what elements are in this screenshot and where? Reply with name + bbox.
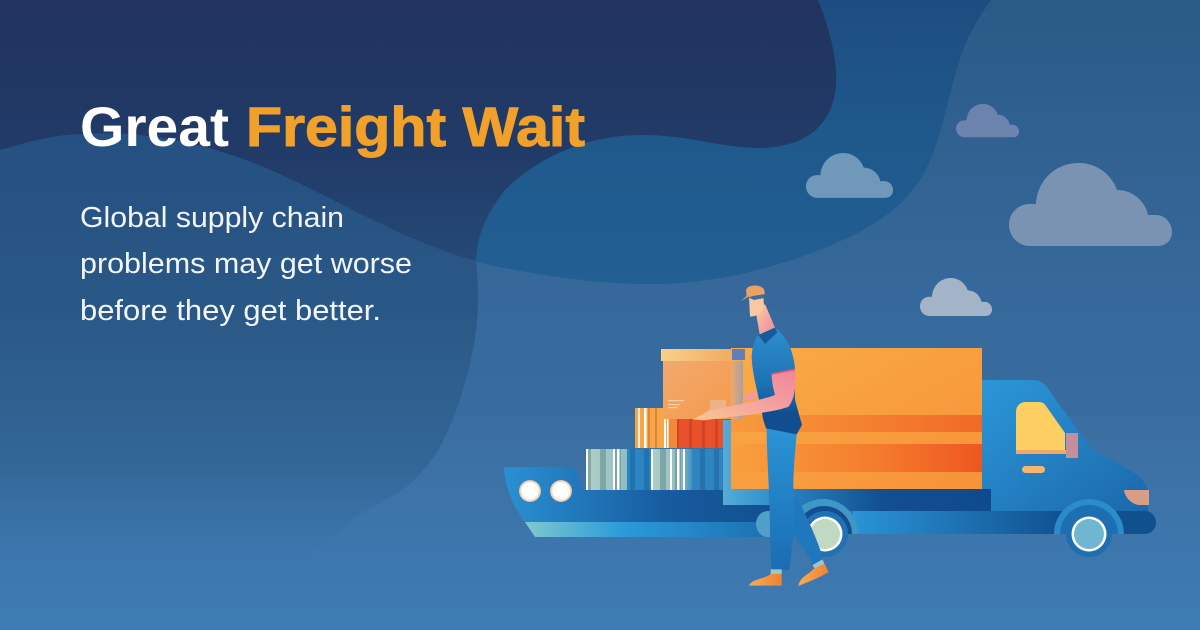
box tape xyxy=(732,349,745,360)
under-cargo strip xyxy=(775,489,991,511)
porthole left xyxy=(519,480,541,502)
shirt xyxy=(752,328,802,434)
title words: Freight Wait: Freight Wait xyxy=(246,95,585,158)
near arm and hand xyxy=(693,369,795,420)
container: top orange xyxy=(635,408,677,448)
hull xyxy=(504,467,780,522)
truck frame xyxy=(723,420,790,505)
subtitle: problems may get worse xyxy=(80,248,412,280)
mirror xyxy=(1066,433,1078,458)
rear wheel xyxy=(788,499,858,557)
cloud: lower xyxy=(920,278,992,316)
front shoe xyxy=(749,574,782,586)
door handle xyxy=(1022,466,1045,473)
porthole right xyxy=(550,480,572,502)
lighter left blob xyxy=(0,133,478,590)
subtitle: Global supply chain xyxy=(80,202,344,234)
cloud: top small xyxy=(956,104,1019,137)
sleeve edge xyxy=(772,369,795,375)
cloud: middle xyxy=(806,153,893,198)
mid blue blob xyxy=(476,0,991,284)
cab xyxy=(982,380,1148,511)
rear leg xyxy=(793,497,824,566)
box side shade xyxy=(731,361,743,419)
container: bottom right xyxy=(651,449,723,490)
rear shoe xyxy=(798,564,829,586)
box lid xyxy=(661,349,745,361)
headlight xyxy=(1124,490,1149,505)
subtitle: before they get better. xyxy=(80,295,381,327)
keel stripe xyxy=(525,522,772,537)
container: top red xyxy=(677,408,723,448)
cargo ship xyxy=(504,408,780,537)
far arm xyxy=(744,391,758,401)
title xyxy=(80,95,585,158)
container: bottom left xyxy=(586,449,651,490)
cloud: large xyxy=(1009,163,1172,246)
cargo box xyxy=(731,348,982,489)
delivery man xyxy=(693,286,829,586)
box body xyxy=(663,361,732,419)
chassis xyxy=(853,511,1156,534)
title word: Great: Great xyxy=(80,95,229,158)
navy blob xyxy=(0,0,991,284)
truck xyxy=(723,348,1156,557)
window sill xyxy=(1016,450,1066,454)
window xyxy=(1016,402,1065,450)
cap xyxy=(741,286,765,301)
box label xyxy=(668,400,726,418)
front leg xyxy=(767,428,797,570)
collar xyxy=(758,328,777,344)
clouds xyxy=(806,104,1172,316)
face xyxy=(749,296,764,317)
subtitle xyxy=(80,202,412,327)
front cuff xyxy=(771,569,782,574)
rear cuff xyxy=(813,559,824,569)
front wheel xyxy=(1054,499,1124,557)
glasses xyxy=(748,294,764,300)
neck xyxy=(756,304,775,336)
horizon band xyxy=(0,416,1200,630)
parcel box xyxy=(661,349,745,419)
fender bump xyxy=(756,511,772,537)
